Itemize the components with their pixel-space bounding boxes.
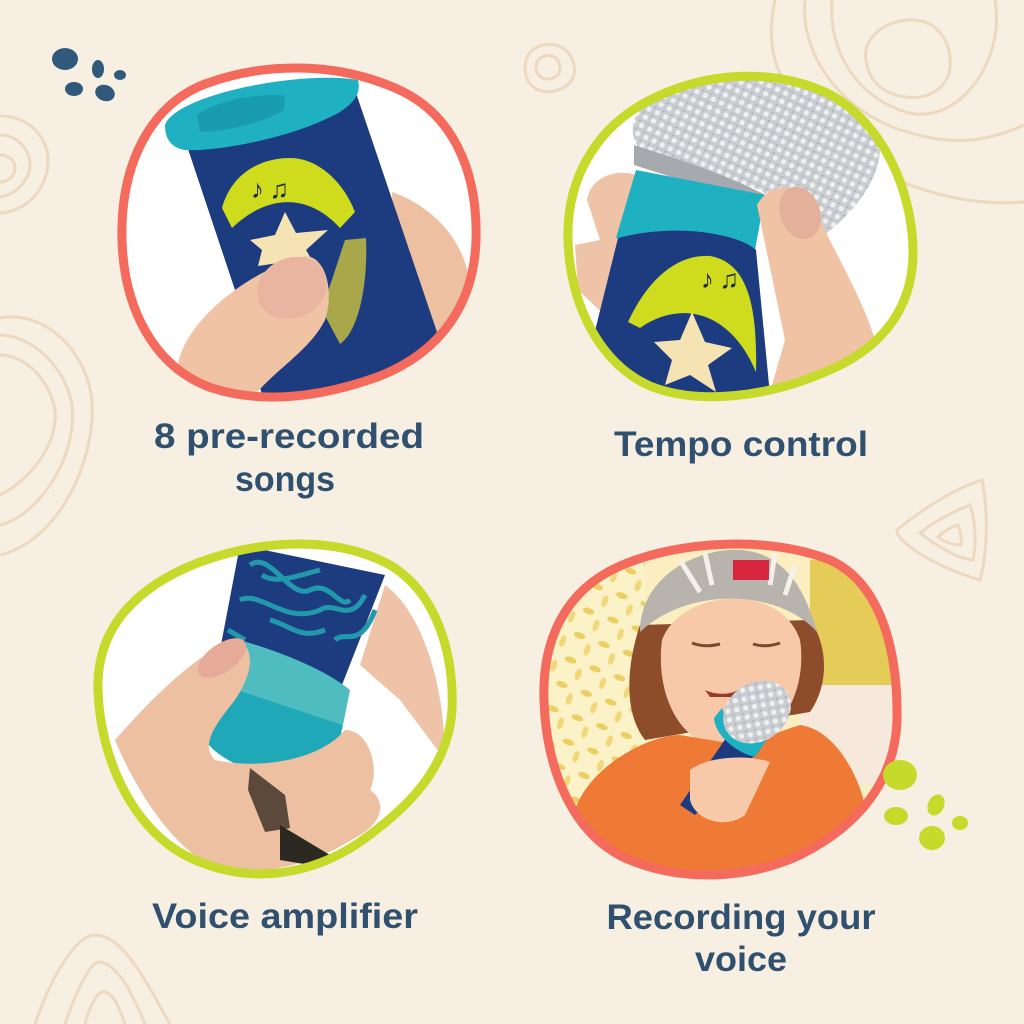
dots: top left bbox=[52, 48, 126, 104]
panel: voice amplifier photo bbox=[90, 530, 460, 890]
panel: pre-recorded songs photo bbox=[117, 64, 481, 402]
caption: Recording your voice bbox=[606, 898, 876, 979]
caption: Recording your voice: Recording your bbox=[606, 898, 876, 937]
caption: Tempo control: Tempo control bbox=[614, 425, 868, 464]
caption: 8 pre-recorded songs: 8 pre-recorded bbox=[154, 417, 424, 456]
caption: 8 pre-recorded songs bbox=[154, 417, 424, 499]
caption: 8 pre-recorded songs: songs bbox=[235, 460, 335, 499]
panel: tempo control photo bbox=[560, 60, 925, 410]
caption: Voice amplifier: Voice amplifier bbox=[152, 897, 418, 936]
dots: right bbox=[883, 760, 968, 850]
panel: tempo control photo: ♪♫ bbox=[701, 264, 739, 294]
panel: pre-recorded songs photo: ♪♫ bbox=[251, 174, 289, 204]
panel: recording your voice photo bbox=[535, 530, 905, 885]
caption: Recording your voice: voice bbox=[695, 940, 787, 979]
